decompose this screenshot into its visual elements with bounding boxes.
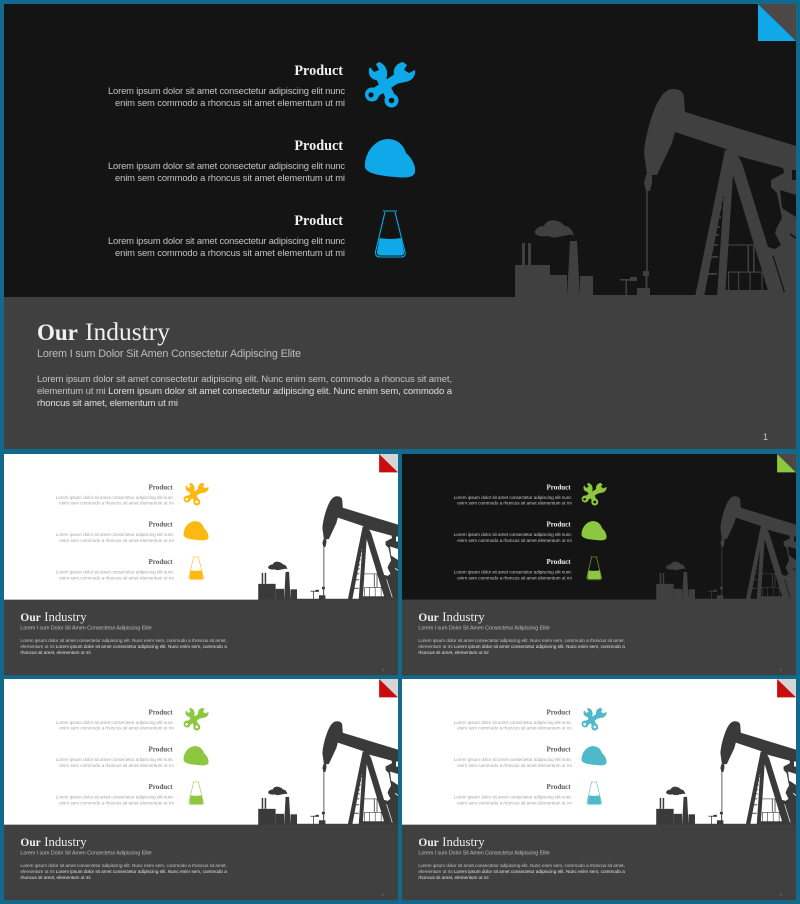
icon: flask [375,211,405,257]
item: product two: Product [546,746,571,754]
item: product three: Lorem ipsum dolor sit amet consectetur adipiscing elit nunc [108,235,345,246]
body text: Lorem ipsum dolor sit amet consectetur adipiscing elit. Nunc enim sem, commodo a rhoncus sit amet, [37,374,452,385]
item: product one [56,708,174,731]
icon: hard hat [184,746,209,765]
title: Our [20,837,41,849]
title: Industry [85,317,170,346]
item: product two: enim sem commodo a rhoncus sit amet elementum ut mi [59,763,174,768]
corner fold: red [777,679,796,697]
subtitle: Lorem I sum Dolor Sit Amen Consectetur Adipiscing Elite [20,626,152,632]
icon: wrenches [582,708,607,730]
body text: rhoncus sit amet, elementum ut mi [20,650,91,656]
body text: rhoncus sit amet, elementum ut mi [418,875,489,881]
corner fold: red [379,454,398,472]
page number: 1 [382,667,385,672]
title: Our [37,320,78,345]
icon: flask [189,557,204,580]
item: product three: Lorem ipsum dolor sit amet consectetur adipiscing elit nunc [454,794,572,799]
item: product two [56,521,174,543]
page number: 1 [780,892,783,897]
panel: yellow light slide [4,454,398,675]
title: Our [418,612,439,624]
item: product three [56,783,174,805]
body text: elementum ut mi Lorem ipsum dolor sit amet consectetur adipiscing elit. Nunc enim sem, commodo a [20,644,227,650]
page number: 1 [382,892,385,897]
item: product one: Product [546,708,571,716]
item: product two: Lorem ipsum dolor sit amet consectetur adipiscing elit nunc [108,160,345,171]
body text: elementum ut mi Lorem ipsum dolor sit amet consectetur adipiscing elit. Nunc enim sem, commodo a [20,869,227,875]
item: product two: Lorem ipsum dolor sit amet consectetur adipiscing elit nunc [56,757,174,762]
item: product three: enim sem commodo a rhoncus sit amet elementum ut mi [457,575,572,580]
page number: 1 [763,432,768,442]
corner fold: red [379,679,398,697]
body text [418,863,625,881]
oil pump and factory silhouette [515,89,796,298]
icon: wrenches [184,708,209,730]
item: product two: enim sem commodo a rhoncus sit amet elementum ut mi [115,172,345,183]
title: Industry [44,835,87,849]
item: product two: enim sem commodo a rhoncus sit amet elementum ut mi [457,538,572,543]
icon: wrenches [184,483,209,505]
item: product one: Product [148,708,173,716]
body text [20,638,227,656]
item: product two: Lorem ipsum dolor sit amet consectetur adipiscing elit nunc [56,532,174,537]
icon: hard hat [365,139,415,177]
item: product one: enim sem commodo a rhoncus sit amet elementum ut mi [59,726,174,731]
item: product three [454,558,572,580]
icon: hard hat [582,746,607,765]
oil pump and factory silhouette [656,721,796,825]
panel: teal light slide [402,679,796,900]
body text: elementum ut mi Lorem ipsum dolor sit amet consectetur adipiscing elit. Nunc enim sem, commodo a [418,644,625,650]
subtitle: Lorem I sum Dolor Sit Amen Consectetur Adipiscing Elite [418,851,550,857]
title: Industry [44,610,87,624]
item: product one: Lorem ipsum dolor sit amet consectetur adipiscing elit nunc [454,495,572,500]
subtitle: Lorem I sum Dolor Sit Amen Consectetur Adipiscing Elite [37,348,301,360]
item: product three: Product [148,783,173,791]
body text [20,863,227,881]
item: product one: enim sem commodo a rhoncus sit amet elementum ut mi [59,501,174,506]
item: product two: Lorem ipsum dolor sit amet consectetur adipiscing elit nunc [454,532,572,537]
item: product one [56,484,174,504]
body text: Lorem ipsum dolor sit amet consectetur adipiscing elit. Nunc enim sem, commodo a rhoncus sit amet, [20,638,227,644]
body text: Lorem ipsum dolor sit amet consectetur adipiscing elit. Nunc enim sem, commodo a rhoncus sit amet, [418,638,625,644]
item: product two: Product [148,521,173,529]
item: product three [108,213,345,258]
body text: rhoncus sit amet, elementum ut mi [20,875,91,881]
title: Our [418,837,439,849]
oil pump and factory silhouette [656,496,796,600]
panel: green light slide [4,679,398,900]
item: product one [108,63,345,108]
item: product three [56,558,174,580]
title: Our [20,612,41,624]
item: product two: Lorem ipsum dolor sit amet consectetur adipiscing elit nunc [454,757,572,762]
icon: flask [587,782,602,805]
item: product one [454,484,572,504]
corner fold: blue [758,4,796,41]
item: product one: Lorem ipsum dolor sit amet consectetur adipiscing elit nunc [108,85,345,96]
item: product one: Product [294,63,343,79]
title: Industry [442,835,485,849]
item: product one: enim sem commodo a rhoncus sit amet elementum ut mi [457,501,572,506]
title: Industry [442,610,485,624]
item: product three: Product [546,558,571,566]
panel: green dark slide [402,454,796,675]
icon: wrenches [365,62,415,108]
item: product three: Product [546,783,571,791]
oil pump and factory silhouette [258,496,398,600]
item: product two: Product [148,746,173,754]
item: product two [108,138,345,183]
item: product one: enim sem commodo a rhoncus sit amet elementum ut mi [115,97,345,108]
oil pump and factory silhouette [258,721,398,825]
icon: hard hat [582,521,607,540]
item: product three: Lorem ipsum dolor sit amet consectetur adipiscing elit nunc [56,569,174,574]
body text: rhoncus sit amet, elementum ut mi [418,650,489,656]
item: product one: enim sem commodo a rhoncus sit amet elementum ut mi [457,726,572,731]
item: product three: enim sem commodo a rhoncus sit amet elementum ut mi [59,575,174,580]
item: product three: enim sem commodo a rhoncus sit amet elementum ut mi [457,800,572,805]
body text: Lorem ipsum dolor sit amet consectetur adipiscing elit. Nunc enim sem, commodo a rhoncus sit amet, [20,863,227,869]
item: product three: Product [294,213,343,229]
item: product two: enim sem commodo a rhoncus sit amet elementum ut mi [59,538,174,543]
item: product one [454,708,572,731]
body text [37,374,453,409]
item: product two [454,521,572,543]
item: product three: Lorem ipsum dolor sit amet consectetur adipiscing elit nunc [56,794,174,799]
subtitle: Lorem I sum Dolor Sit Amen Consectetur Adipiscing Elite [20,851,152,857]
item: product one: Product [148,483,173,491]
icon: wrenches [582,483,607,505]
item: product two [454,746,572,768]
subtitle: Lorem I sum Dolor Sit Amen Consectetur Adipiscing Elite [418,626,550,632]
item: product one: Product [546,483,571,491]
body text: rhoncus sit amet, elementum ut mi [37,398,178,409]
item: product one: Lorem ipsum dolor sit amet consectetur adipiscing elit nunc [56,495,174,500]
body text [418,638,625,656]
item: product three: Lorem ipsum dolor sit amet consectetur adipiscing elit nunc [454,569,572,574]
panel: main dark slide [4,4,796,449]
item: product three: Product [148,558,173,566]
icon: hard hat [184,521,209,540]
item: product one: Lorem ipsum dolor sit amet consectetur adipiscing elit nunc [454,720,572,725]
item: product one: Lorem ipsum dolor sit amet consectetur adipiscing elit nunc [56,720,174,725]
item: product two: Product [546,521,571,529]
item: product three [454,783,572,805]
corner fold: green [777,454,796,472]
item: product two [56,746,174,768]
body text: elementum ut mi Lorem ipsum dolor sit amet consectetur adipiscing elit. Nunc enim sem, commodo a [418,869,625,875]
item: product three: enim sem commodo a rhoncus sit amet elementum ut mi [115,247,345,258]
page number: 1 [780,667,783,672]
item: product two: Product [294,138,343,154]
icon: flask [189,782,204,805]
body text: elementum ut mi Lorem ipsum dolor sit amet consectetur adipiscing elit. Nunc enim sem, commodo a [37,386,453,397]
icon: flask [587,557,602,580]
item: product two: enim sem commodo a rhoncus sit amet elementum ut mi [457,763,572,768]
item: product three: enim sem commodo a rhoncus sit amet elementum ut mi [59,800,174,805]
body text: Lorem ipsum dolor sit amet consectetur adipiscing elit. Nunc enim sem, commodo a rhoncus sit amet, [418,863,625,869]
